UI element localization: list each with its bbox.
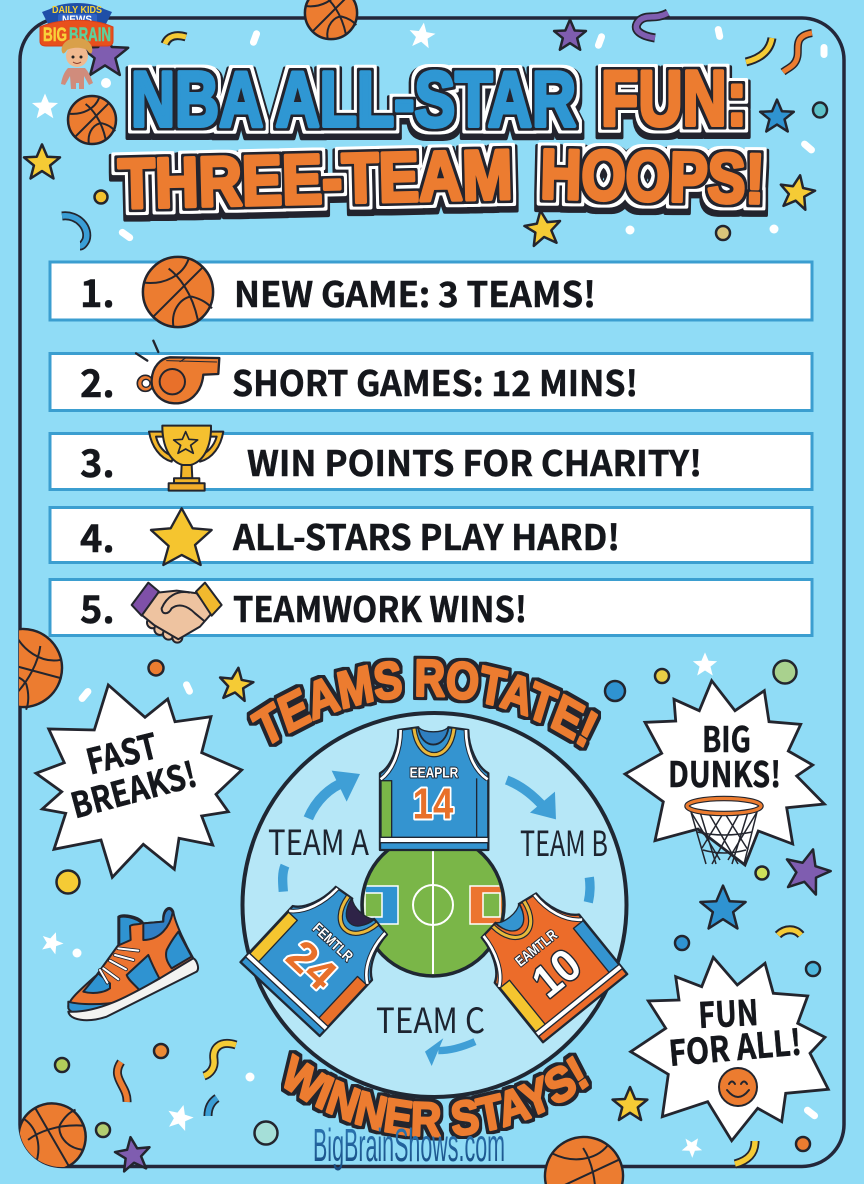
text: dunks: DUNKS! [668, 747, 781, 798]
icon: smiley [719, 1068, 757, 1106]
heading: teams rotate: TEAMS ROTATE! [246, 656, 602, 751]
jersey: right 10 [466, 879, 627, 1042]
rule list [50, 257, 812, 643]
jersey: left 24: 24 [277, 932, 345, 1000]
label: team a: TEAM A [268, 815, 370, 866]
jersey: top 14: 14 [413, 780, 453, 828]
row 4 [50, 508, 812, 563]
row 1 [50, 262, 812, 320]
icon: whistle [136, 341, 219, 403]
basketball: top [305, 0, 357, 39]
icon: basketball [143, 257, 213, 327]
icon: hoop [687, 798, 761, 864]
title: NBA ALL-STAR: NBA ALL-STAR [131, 55, 576, 143]
logo text: big: BIG [43, 25, 67, 46]
title: THREE-TEAM: THREE-TEAM [117, 135, 513, 223]
stars: top area [24, 20, 817, 247]
logo text: brain: BRAIN [69, 25, 111, 46]
starburst: fun for all [631, 957, 828, 1141]
starburst: fast breaks [36, 685, 242, 877]
text: fun: FUN [697, 985, 759, 1039]
text: for all: FOR ALL! [667, 1015, 803, 1077]
basketball: left edge [19, 628, 64, 710]
title: HOOPS: HOOPS! [540, 135, 765, 218]
logo text: daily kids: DAILY KIDS [52, 5, 102, 16]
text: big: BIG [702, 712, 751, 763]
logo plate [40, 20, 113, 46]
label: team c: TEAM C [376, 993, 485, 1044]
logo banner top [42, 3, 112, 24]
logo: Daily Kids News with Big Brain [40, 3, 113, 89]
jersey: left 24: FEMTLR [309, 920, 356, 966]
jersey: right 10: EAMTLR [513, 927, 561, 970]
icon: trophy [149, 426, 223, 491]
rotation wheel [241, 713, 627, 1097]
starburst: big dunks [625, 681, 824, 865]
text: breaks: BREAKS! [65, 747, 202, 829]
row 2 [50, 353, 812, 410]
icon: handshake [132, 583, 222, 643]
jersey: top 14 [380, 727, 488, 850]
confetti and dots: lower area [55, 660, 820, 1164]
row 4: ALL-STARS PLAY HARD! [232, 510, 620, 561]
row 3: WIN POINTS FOR CHARITY! [247, 436, 702, 487]
court [362, 834, 504, 976]
row 2: SHORT GAMES: 12 MINS! [232, 356, 638, 407]
row 3: 3. [80, 433, 115, 488]
text: BigBrainShows.com [313, 1119, 505, 1171]
row 1: NEW GAME: 3 TEAMS! [234, 267, 596, 318]
mascot [61, 38, 93, 89]
title [117, 54, 765, 223]
basketball: bottom left [19, 1102, 87, 1167]
icon: sneaker [68, 908, 198, 1020]
logo text: news: NEWS [62, 14, 92, 26]
rotation arrows [283, 771, 590, 1066]
title: FUN: FUN: [601, 54, 747, 142]
row 3 [50, 433, 812, 490]
row 4: 4. [80, 508, 115, 563]
row 5: TEAMWORK WINS! [233, 582, 527, 633]
jersey: right 10: 10 [522, 938, 591, 1007]
basketball: upper left [68, 96, 116, 144]
icon: star [151, 508, 212, 565]
text: fast: FAST [80, 718, 163, 785]
logo news plate [58, 14, 97, 23]
wheel disc [242, 713, 626, 1097]
jersey: top 14: EEAPLR [410, 765, 459, 781]
jersey: left 24 [241, 872, 403, 1036]
row 1: 1. [80, 263, 115, 318]
row 2: 2. [80, 353, 115, 408]
confetti and dots: top area [62, 13, 828, 246]
basketball: bottom right [534, 1126, 634, 1184]
row 5 [50, 579, 812, 636]
row 5: 5. [80, 579, 115, 634]
label: team b: TEAM B [520, 816, 608, 867]
stars: lower area [38, 652, 835, 1172]
heading: winner stays: WINNER STAYS! [281, 1050, 592, 1141]
